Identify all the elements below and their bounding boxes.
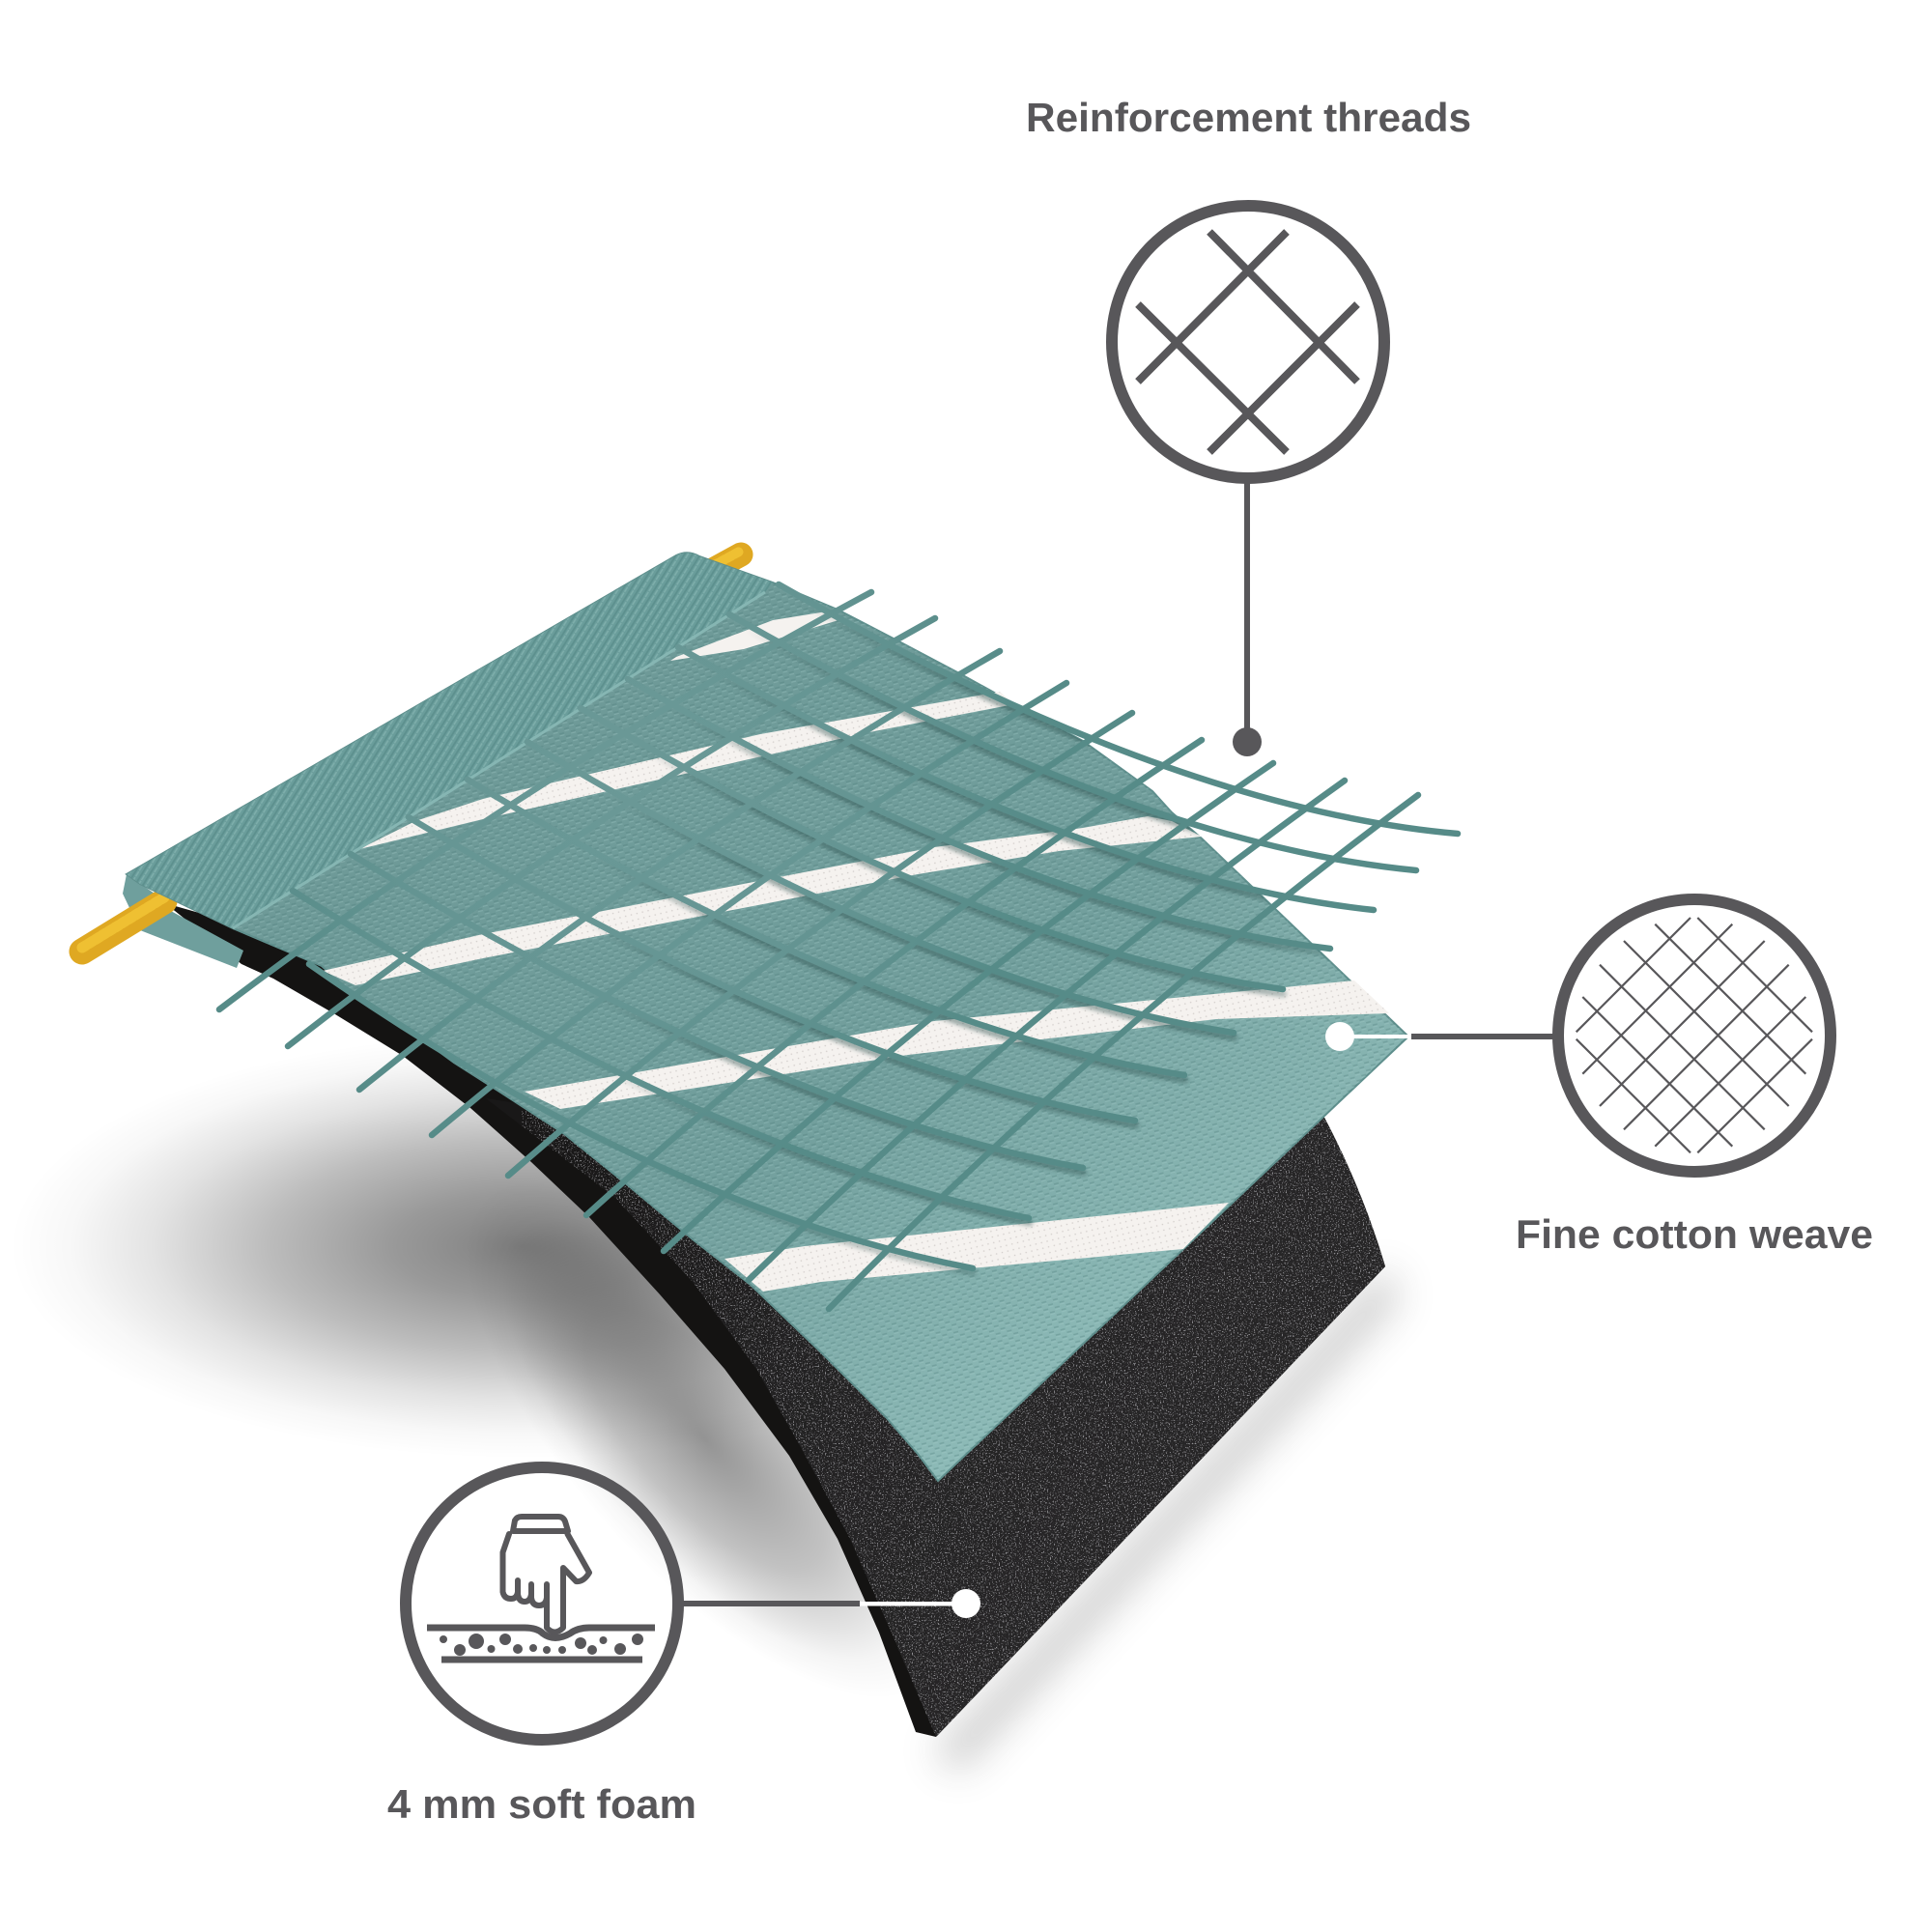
white stripe 5 [724, 1203, 1229, 1292]
heading: soft foam: 4 mm soft foam [387, 1781, 696, 1827]
yellow rod right [700, 551, 741, 577]
fabric weave texture [127, 553, 1408, 1481]
connector line and dot [1233, 481, 1262, 756]
drop shadow under foam [10, 1034, 1401, 1773]
heading: fine cotton weave: Fine cotton weave [1516, 1211, 1873, 1257]
foam layer [165, 903, 1401, 1748]
icon: coarse mesh [1112, 206, 1384, 478]
thread shadows [597, 612, 1323, 1277]
reinforcement threads running down-right [293, 584, 1458, 1268]
foam face [486, 1098, 1385, 1737]
connector line and dot [682, 1589, 980, 1618]
callout: soft foam [387, 1467, 980, 1827]
foam bubbles [440, 1634, 643, 1656]
hand [502, 1517, 589, 1633]
fabric body [127, 553, 1408, 1481]
white stripe 4 [525, 980, 1389, 1109]
fabric layer [127, 553, 1408, 1481]
heading: reinforcement threads: Reinforcement threads [1026, 95, 1471, 140]
icon: fine mesh [1558, 899, 1831, 1172]
white stripe 1 [670, 611, 838, 661]
white stripe 3 [323, 816, 1202, 985]
foam surface [427, 1628, 655, 1638]
foam base [441, 1656, 642, 1663]
icon: finger pressing foam [406, 1467, 678, 1740]
foam side edge [165, 903, 1385, 1737]
connector line and dot [1325, 1022, 1561, 1051]
callout: reinforcement threads [1026, 95, 1471, 756]
underside fold of fabric [123, 874, 243, 968]
callout: fine cotton weave [1325, 899, 1873, 1257]
reinforcement threads running up-right [219, 592, 1418, 1309]
foam speckle [522, 1111, 1401, 1748]
white stripe 2 [359, 692, 1014, 849]
yellow rod left [82, 897, 164, 952]
fabric hem [127, 553, 773, 928]
stripe dots [323, 692, 1389, 1292]
